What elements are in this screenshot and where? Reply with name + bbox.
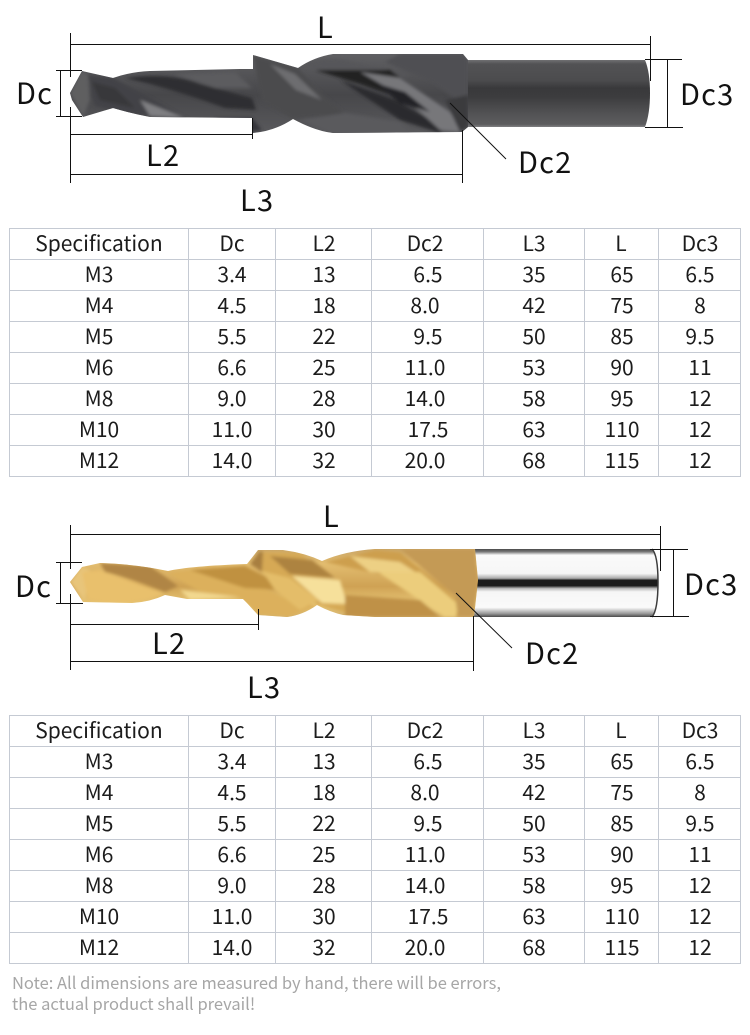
table 1 rows: 20.0 xyxy=(405,445,445,475)
table 1 rows: 12 xyxy=(688,445,712,475)
dimension lines: black drill xyxy=(56,33,683,183)
table 1 rows: M12 xyxy=(79,445,119,475)
table 1 rows: 75 xyxy=(610,290,634,320)
table 1 rows: 11.0 xyxy=(405,352,445,382)
table 1 header: Specification xyxy=(35,228,163,258)
table 1 rows: M3 xyxy=(85,259,113,289)
footnote: Note: All dimensions are measured by hand, there will be errors, xyxy=(12,970,501,994)
table 2 rows: 6.6 xyxy=(217,839,247,869)
table 1 rows: 63 xyxy=(522,414,546,444)
table 1 rows: 13 xyxy=(312,259,336,289)
table 1 rows: 8.0 xyxy=(410,290,440,320)
table 2 rows: 8.0 xyxy=(410,777,440,807)
table 2 rows: 5.5 xyxy=(217,808,247,838)
table 2 rows: 95 xyxy=(610,870,634,900)
table 2 rows: 28 xyxy=(312,870,336,900)
table 2 rows: 11.0 xyxy=(405,839,445,869)
table 1 header: L3 xyxy=(522,228,546,258)
table 2 rows: 50 xyxy=(522,808,546,838)
table 2 rows: 53 xyxy=(522,839,546,869)
footnote xyxy=(12,970,501,1015)
gold body xyxy=(70,549,478,617)
table 1 rows: M6 xyxy=(85,352,113,382)
table 1 rows: 22 xyxy=(312,321,336,351)
table 2 rows: 68 xyxy=(522,932,546,962)
table 1 rows: 35 xyxy=(522,259,546,289)
table 2 rows: M10 xyxy=(79,901,119,931)
table 2 rows: 35 xyxy=(522,746,546,776)
table 2 rows: M3 xyxy=(85,746,113,776)
table 2 rows: 11 xyxy=(688,839,712,869)
table 2 rows: 85 xyxy=(610,808,634,838)
table 1 rows: 30 xyxy=(312,414,336,444)
table 1 rows: M10 xyxy=(79,414,119,444)
table 2 rows: 9.5 xyxy=(413,808,443,838)
table 1 rows: 8 xyxy=(694,290,706,320)
table 2 rows: 13 xyxy=(312,746,336,776)
labels: gold drill xyxy=(15,494,738,707)
labels: gold drill: L3 xyxy=(247,665,281,707)
table 1 rows: M5 xyxy=(85,321,113,351)
dimension lines: gold drill xyxy=(56,525,689,671)
table 1 rows: 14.0 xyxy=(212,445,252,475)
labels: gold drill: Dc xyxy=(15,564,52,606)
table 2 header: L xyxy=(615,715,627,745)
table 1 rows: 12 xyxy=(688,383,712,413)
table 1 rows: 18 xyxy=(312,290,336,320)
table 1 rows: 90 xyxy=(610,352,634,382)
table 1 rows: 9.5 xyxy=(685,321,715,351)
gold shank xyxy=(474,549,658,617)
table 2 rows: 12 xyxy=(688,870,712,900)
table 1 header: Dc2 xyxy=(407,228,443,258)
table 2 rows: 18 xyxy=(312,777,336,807)
table 1 rows: 28 xyxy=(312,383,336,413)
table 2 header: L2 xyxy=(312,715,336,745)
table 1 rows: M4 xyxy=(85,290,113,320)
labels: black drill: Dc xyxy=(16,71,53,113)
table 2 rows: 58 xyxy=(522,870,546,900)
table 2 rows: 110 xyxy=(605,901,639,931)
table 2 rows: M5 xyxy=(85,808,113,838)
labels: gold drill: Dc3 xyxy=(684,562,738,604)
table 1 rows: 42 xyxy=(522,290,546,320)
table 2 rows: M6 xyxy=(85,839,113,869)
labels: black drill: L3 xyxy=(240,178,274,220)
table 1 rows: 6.5 xyxy=(413,259,443,289)
table 1 rows: 12 xyxy=(688,414,712,444)
table 1 rows: 53 xyxy=(522,352,546,382)
table 1 rows: 110 xyxy=(605,414,639,444)
table 1 rows: 50 xyxy=(522,321,546,351)
table 2 rows: 6.5 xyxy=(685,746,715,776)
table 2 rows: 12 xyxy=(688,901,712,931)
labels: gold drill: L xyxy=(323,494,340,536)
table 1 rows: 5.5 xyxy=(217,321,247,351)
table 1 rows: 9.5 xyxy=(413,321,443,351)
table 2 rows: 30 xyxy=(312,901,336,931)
black drill xyxy=(70,54,650,133)
footnote: the actual product shall prevail! xyxy=(12,991,255,1015)
table 1 rows: 6.5 xyxy=(685,259,715,289)
labels: black drill: L xyxy=(317,5,334,47)
table 2 rows: 32 xyxy=(312,932,336,962)
table 2 rows: 20.0 xyxy=(405,932,445,962)
table 1 header: L xyxy=(615,228,627,258)
table 2 rows: 25 xyxy=(312,839,336,869)
drill body xyxy=(70,54,468,133)
table 2 header xyxy=(35,715,718,745)
table 2 rows: 17.5 xyxy=(408,901,448,931)
table 1 rows: 14.0 xyxy=(405,383,445,413)
table 1 header: Dc3 xyxy=(682,228,718,258)
table 1 rows: 6.6 xyxy=(217,352,247,382)
labels: black drill: Dc2 xyxy=(518,140,572,182)
table 1 rows: 85 xyxy=(610,321,634,351)
table 1 rows: 11.0 xyxy=(212,414,252,444)
table 2 rows: 90 xyxy=(610,839,634,869)
table 1 header xyxy=(35,228,718,258)
table 2 xyxy=(10,715,740,964)
table 2 rows: 3.4 xyxy=(217,746,247,776)
table 2 header: Dc2 xyxy=(407,715,443,745)
table 1 rows: 4.5 xyxy=(217,290,247,320)
labels: gold drill: Dc2 xyxy=(525,631,579,673)
table 2 rows: 6.5 xyxy=(413,746,443,776)
table 2 rows: 14.0 xyxy=(405,870,445,900)
leader line: Dc2 gold xyxy=(456,593,512,648)
table 2 rows: 63 xyxy=(522,901,546,931)
table 2 rows: 8 xyxy=(694,777,706,807)
table 1 rows: 17.5 xyxy=(408,414,448,444)
table 1 xyxy=(10,228,740,477)
labels: gold drill: L2 xyxy=(152,621,186,663)
table 2 header: Specification xyxy=(35,715,163,745)
labels: black drill xyxy=(16,5,734,220)
table 1 rows: M8 xyxy=(85,383,113,413)
table 1 header: L2 xyxy=(312,228,336,258)
table 1 rows: 95 xyxy=(610,383,634,413)
table 1 header: Dc xyxy=(219,228,245,258)
table 2 rows: 42 xyxy=(522,777,546,807)
table 2 rows xyxy=(79,746,715,962)
table 2 rows: 115 xyxy=(605,932,639,962)
labels: black drill: Dc3 xyxy=(680,72,734,114)
table 1 rows: 58 xyxy=(522,383,546,413)
table 2 rows: M8 xyxy=(85,870,113,900)
table 1 rows: 9.0 xyxy=(217,383,247,413)
table 2 header: L3 xyxy=(522,715,546,745)
table 2 header: Dc3 xyxy=(682,715,718,745)
table 2 rows: 4.5 xyxy=(217,777,247,807)
labels: black drill: L2 xyxy=(146,133,180,175)
table 1 rows: 25 xyxy=(312,352,336,382)
table 2 rows: 12 xyxy=(688,932,712,962)
table 2 rows: 65 xyxy=(610,746,634,776)
table 2 rows: 22 xyxy=(312,808,336,838)
leader line: Dc2 black xyxy=(450,103,506,159)
table 1 rows: 3.4 xyxy=(217,259,247,289)
table 2 rows: 11.0 xyxy=(212,901,252,931)
table 1 rows: 32 xyxy=(312,445,336,475)
table 1 rows: 115 xyxy=(605,445,639,475)
table 2 rows: 14.0 xyxy=(212,932,252,962)
gold drill xyxy=(60,545,658,620)
table 2 rows: 9.5 xyxy=(685,808,715,838)
table 1 rows: 65 xyxy=(610,259,634,289)
table 1 rows: 11 xyxy=(688,352,712,382)
table 2 rows: M12 xyxy=(79,932,119,962)
table 1 rows xyxy=(79,259,715,475)
table 1 rows: 68 xyxy=(522,445,546,475)
table 2 rows: 75 xyxy=(610,777,634,807)
table 2 rows: 9.0 xyxy=(217,870,247,900)
drill shank xyxy=(466,60,650,127)
table 2 header: Dc xyxy=(219,715,245,745)
table 2 rows: M4 xyxy=(85,777,113,807)
